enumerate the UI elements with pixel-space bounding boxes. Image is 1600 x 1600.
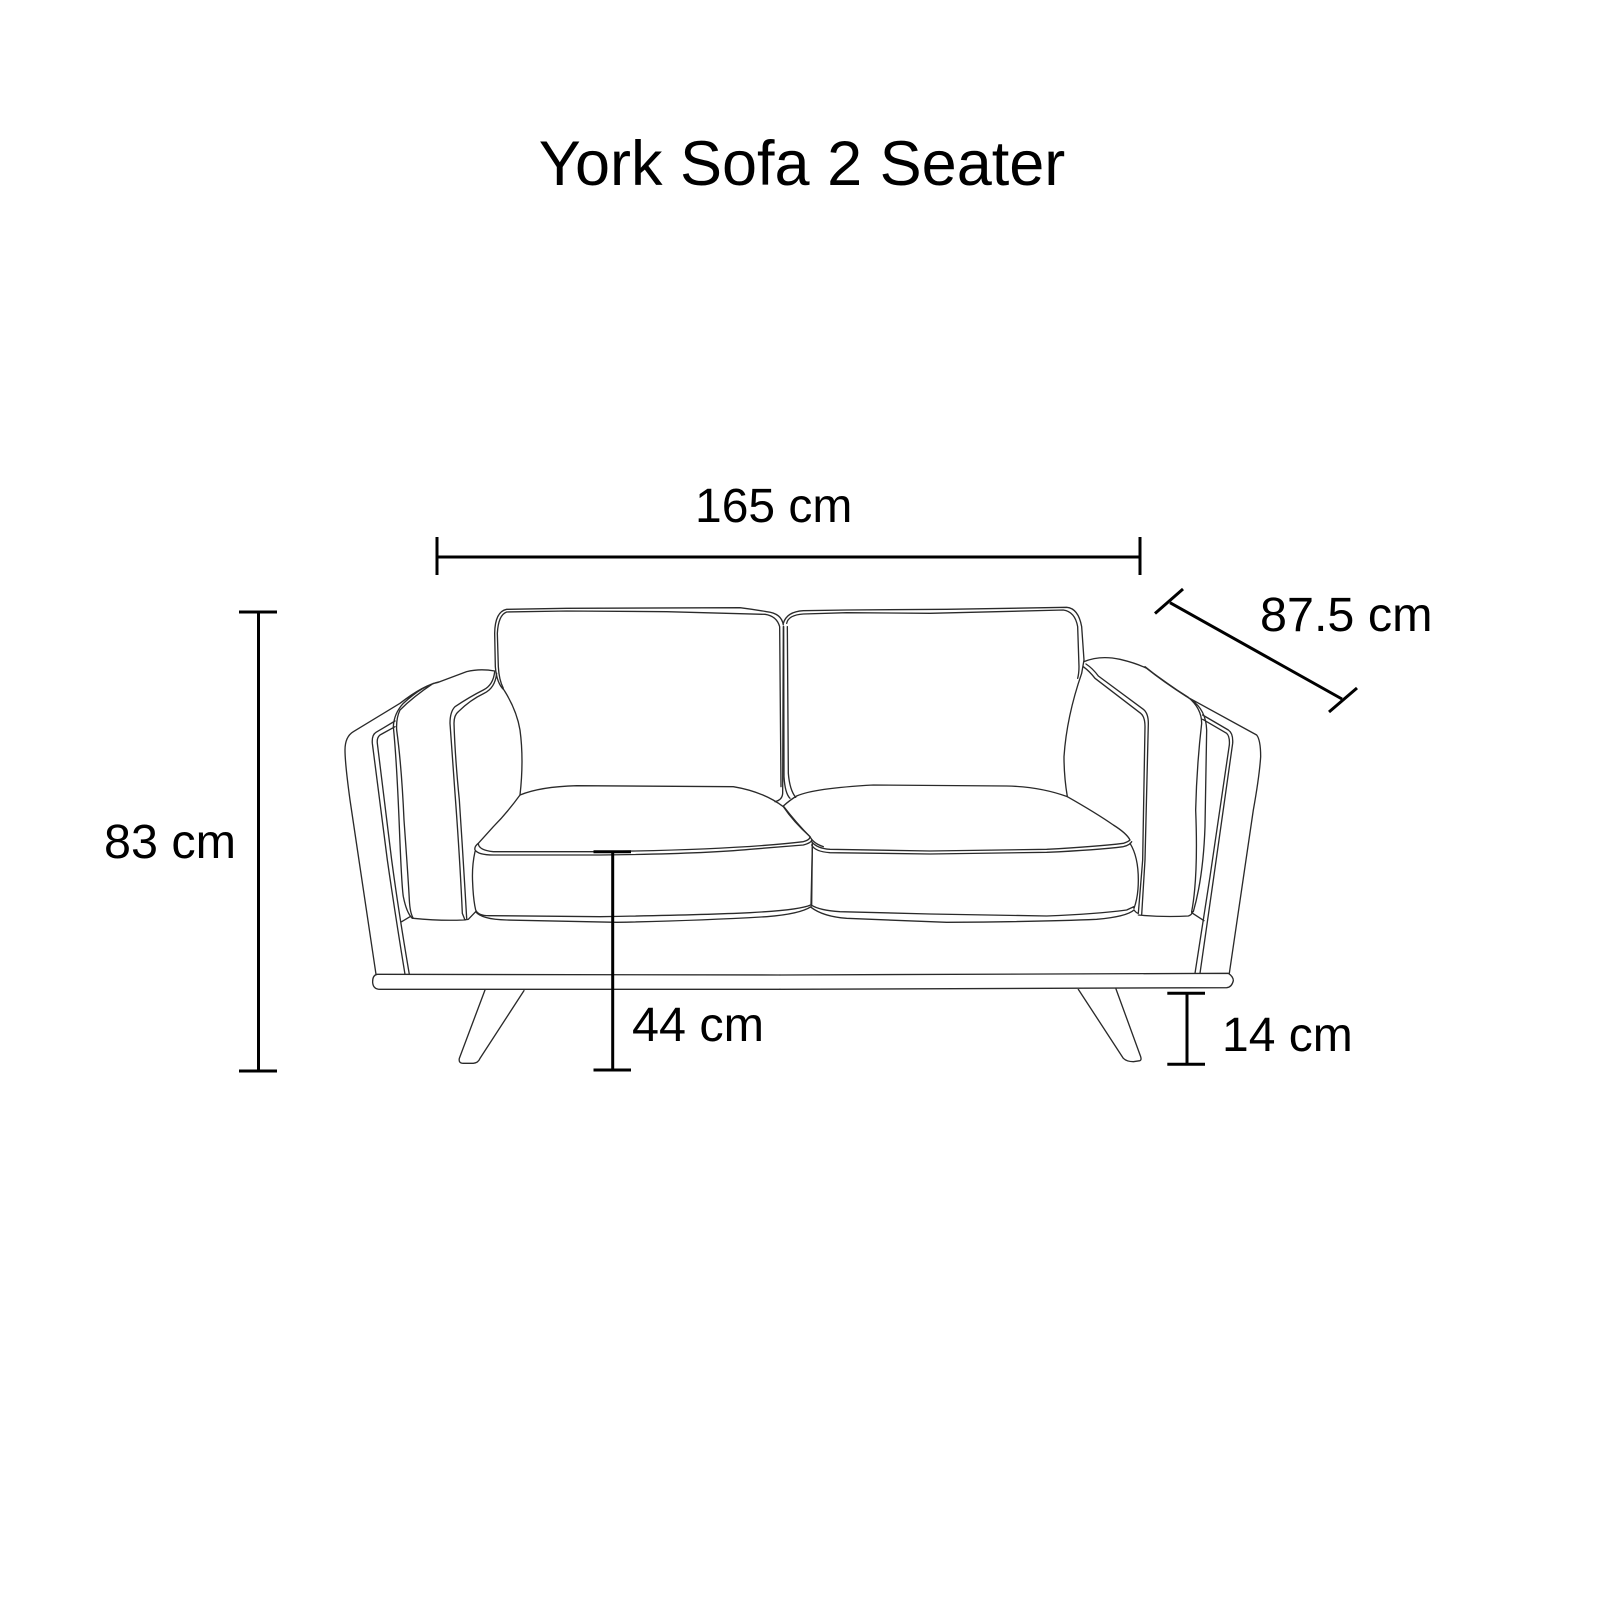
title: York Sofa 2 Seater [539, 129, 1065, 199]
sofa right half [780, 607, 1261, 1062]
left arm [345, 670, 497, 974]
dimension: leg height 14 cm: 14 cm [1222, 1009, 1353, 1062]
dimension: depth 87.5 cm [1155, 588, 1433, 712]
dimension: height 83 cm: 83 cm [104, 815, 236, 869]
right arm [1083, 658, 1261, 973]
sofa left half [345, 608, 812, 1063]
right base rail and leg [780, 973, 1233, 1062]
dimension: width 165 cm: 165 cm [695, 480, 852, 533]
dimension: seat height 44 cm: 44 cm [632, 998, 764, 1052]
sofa line drawing [345, 607, 1261, 1063]
dimension: depth 87.5 cm: 87.5 cm [1260, 588, 1433, 642]
left seat cushion [472, 786, 812, 922]
left base rail and leg [373, 974, 780, 1063]
right back cushion [783, 607, 1084, 798]
right seat cushion [783, 785, 1138, 922]
left back cushion [495, 608, 783, 802]
